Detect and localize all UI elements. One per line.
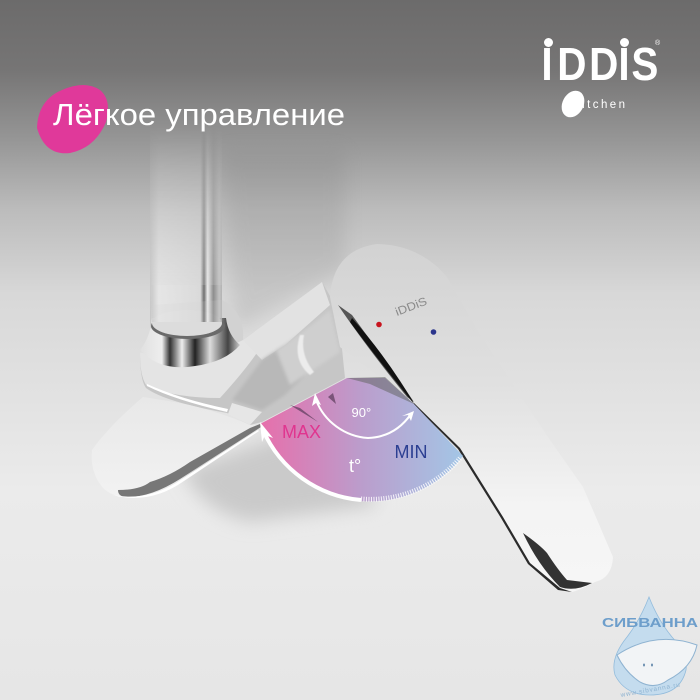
watermark url: www.sibvanna.ru bbox=[619, 682, 681, 699]
pipe shadow bbox=[222, 150, 345, 330]
faucet collar bbox=[140, 285, 240, 367]
angle label: 90° bbox=[352, 405, 371, 420]
blue dot bbox=[431, 329, 436, 335]
title pink blob bbox=[37, 85, 108, 153]
faucet handle bbox=[330, 244, 613, 592]
red dot bbox=[376, 322, 382, 327]
logo bbox=[541, 38, 661, 121]
watermark bath bbox=[617, 639, 697, 686]
logo kitchen text: kitchen bbox=[574, 99, 625, 111]
handle brand: iDDiS bbox=[394, 296, 429, 319]
pedestal disc bbox=[150, 300, 243, 350]
spout pipe bbox=[150, 152, 222, 328]
fan sector bbox=[260, 378, 463, 501]
logo i dots bbox=[544, 38, 629, 47]
left lever highlight bbox=[112, 430, 259, 498]
temperature label: t° bbox=[349, 456, 361, 476]
scale arrowhead bbox=[260, 422, 273, 442]
title: Лёгкое управление bbox=[53, 97, 345, 132]
faucet base body bbox=[140, 282, 345, 425]
faucet shadow bbox=[183, 430, 380, 522]
handle edge line bbox=[413, 403, 572, 592]
handle tip crescent bbox=[523, 533, 592, 589]
watermark drop bbox=[614, 597, 686, 695]
logo blob bbox=[557, 87, 589, 121]
MIN label: MIN bbox=[394, 442, 428, 462]
scale arc bbox=[263, 430, 361, 500]
logo registered mark: ® bbox=[655, 39, 661, 47]
left lever bbox=[92, 397, 262, 497]
watermark СИБВАННА bbox=[602, 597, 699, 699]
handle dark slit bbox=[338, 305, 414, 402]
fan reflections bbox=[347, 377, 414, 404]
MAX label: MAX bbox=[282, 422, 321, 442]
logo wordmark: IDDIS bbox=[541, 40, 658, 91]
temperature fan bbox=[260, 377, 463, 501]
rotation arrowheads bbox=[312, 393, 414, 421]
scale ticks bbox=[361, 457, 461, 499]
watermark face bbox=[643, 664, 653, 666]
left lever edge reflection bbox=[118, 424, 261, 497]
rotation arc bbox=[316, 400, 411, 438]
watermark name: СИБВАННА bbox=[602, 615, 699, 630]
